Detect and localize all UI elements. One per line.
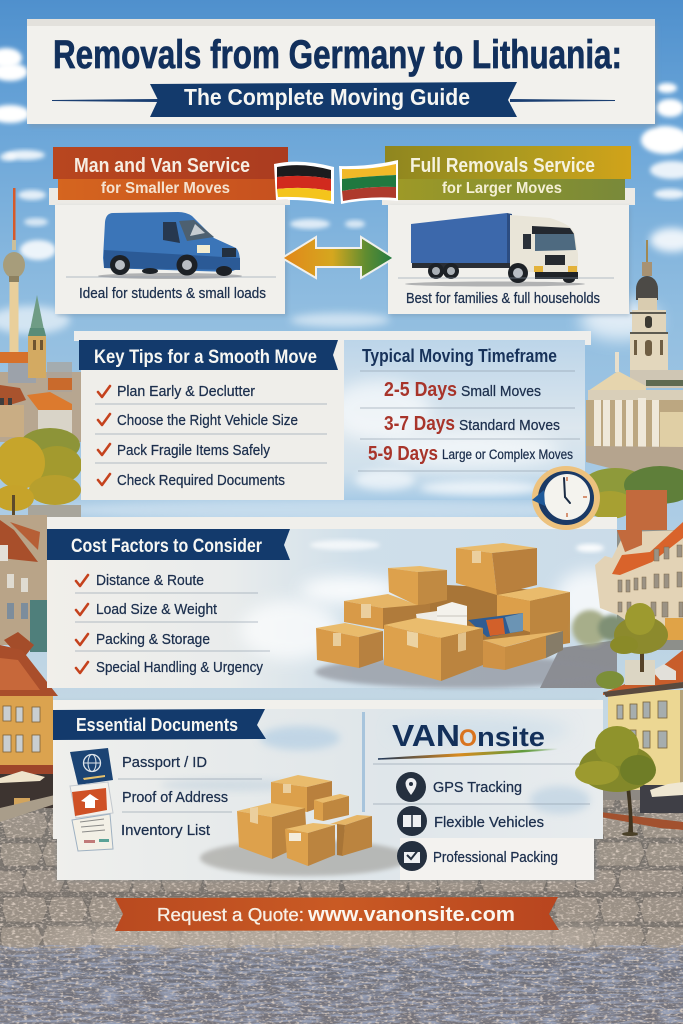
- box middle left: [344, 594, 430, 629]
- panel: moving timeframe: [330, 340, 585, 500]
- service header: [53, 147, 288, 200]
- white boxes: [416, 602, 467, 631]
- logo: VANonsite: VAN: [392, 718, 460, 753]
- foreground tree: [575, 726, 656, 836]
- cost list: Special Handling & Urgency: [96, 660, 264, 676]
- text: proof of address: Proof of Address: [122, 790, 228, 806]
- illustration: document boxes: [200, 775, 410, 876]
- panel: full removals service: [382, 146, 635, 316]
- blue and orange boxes: [468, 613, 523, 637]
- text: inventory list: Inventory List: [121, 823, 210, 839]
- icon: clock: [532, 466, 600, 530]
- logo: VANonsite: nsite: [477, 722, 545, 752]
- tree line behind buildings: [579, 466, 683, 519]
- heading: Typical Moving Timeframe: [362, 346, 557, 366]
- cost list: Packing & Storage: [96, 632, 210, 648]
- back: [420, 585, 545, 640]
- row: standard moves: Standard Moves: [459, 417, 560, 434]
- box front large: [384, 618, 483, 681]
- panel: key tips: [79, 340, 344, 500]
- caption: Ideal for students & small loads: [79, 286, 266, 302]
- orange corner building: [0, 645, 58, 822]
- service header: [385, 146, 631, 200]
- row: small moves: 2-5 Days: [384, 379, 457, 401]
- icon: GPS: [396, 772, 426, 802]
- heading ribbon: Key Tips for a Smooth Move: [94, 347, 317, 368]
- caption: Best for families & full households: [406, 291, 600, 307]
- box small: [314, 794, 349, 821]
- service header: Man and Van Service: [74, 155, 250, 177]
- call to action ribbon: Request a Quote:: [157, 904, 304, 925]
- panel: documents and company: [53, 700, 603, 881]
- tip list: Pack Fragile Items Safely: [117, 443, 271, 459]
- heading ribbon: [79, 340, 338, 370]
- illustration: stacked boxes: [315, 543, 615, 688]
- cost list: Load Size & Weight: [96, 602, 217, 618]
- cobblestone ground: [0, 775, 683, 1024]
- road in background: [540, 640, 617, 688]
- text: flexible vehicles: Flexible Vehicles: [434, 815, 544, 831]
- cost list: [76, 573, 264, 676]
- tip list: Plan Early & Declutter: [117, 384, 255, 400]
- row: large moves: Large or Complex Moves: [442, 447, 573, 462]
- text: passport: Passport / ID: [122, 755, 207, 771]
- box bottom left: [316, 623, 383, 668]
- box top right: [456, 543, 537, 595]
- subtitle ribbon: [52, 82, 615, 117]
- icon: proof of address: [70, 782, 113, 818]
- icon: German flag: [274, 162, 334, 204]
- panel: cost factors: [47, 517, 625, 688]
- right cityscape: [575, 240, 683, 830]
- box right: [497, 587, 570, 650]
- box back right: [330, 815, 372, 856]
- box big left: [237, 803, 307, 859]
- call to action ribbon: www.vanonsite.com: [307, 904, 515, 926]
- panel: tips and timeframe: [74, 331, 591, 500]
- panel: title: [27, 19, 657, 127]
- row: small moves: Small Moves: [461, 383, 541, 400]
- box front: [285, 823, 335, 866]
- neoclassical portico: [586, 352, 683, 448]
- row: standard moves: 3-7 Days: [384, 413, 455, 435]
- panel: man and van service: [49, 147, 290, 316]
- left cityscape: [0, 188, 82, 822]
- service header: for Larger Moves: [442, 180, 562, 197]
- TV tower: [3, 188, 25, 354]
- green tree: [610, 603, 668, 672]
- logo: VANonsite: O: [459, 725, 477, 752]
- yellow corner building: [603, 650, 683, 813]
- heading ribbon: [53, 709, 266, 740]
- box low right: [483, 631, 563, 670]
- heading ribbon: [47, 529, 290, 560]
- icon: inventory list: [72, 814, 113, 851]
- tip list: [98, 384, 298, 489]
- text: GPS tracking: GPS Tracking: [433, 780, 522, 796]
- icon: removals truck: [405, 213, 585, 286]
- row: standard moves: [384, 413, 560, 435]
- logo: VANonsite: [378, 718, 558, 759]
- icon: blue van: [98, 212, 242, 279]
- box upper: [388, 566, 447, 606]
- yellow-green trees: [0, 428, 82, 525]
- icon: passport: [70, 748, 113, 785]
- row: large moves: 5-9 Days: [368, 443, 438, 465]
- baroque church tower: [630, 240, 668, 370]
- heading ribbon: Cost Factors to Consider: [71, 536, 262, 557]
- service header: for Smaller Moves: [101, 180, 230, 197]
- church spire: [28, 295, 46, 378]
- arrow: between services: [282, 237, 394, 278]
- subtitle ribbon: The Complete Moving Guide: [184, 84, 470, 110]
- service header: Full Removals Service: [410, 155, 595, 177]
- text: professional packing: Professional Packing: [433, 850, 558, 866]
- icon: vehicles: [397, 806, 427, 836]
- right town buildings: [572, 522, 683, 689]
- highlight strip: [400, 838, 594, 880]
- icon: Lithuanian flag: [339, 160, 398, 204]
- call to action ribbon: [115, 897, 559, 931]
- cost list: Distance & Route: [96, 573, 204, 589]
- tip list: Choose the Right Vehicle Size: [117, 413, 298, 429]
- row: small moves: [384, 379, 541, 401]
- row: large moves: [368, 443, 573, 465]
- tip list: Check Required Documents: [117, 473, 285, 489]
- clouds: [0, 48, 683, 520]
- icon: packing: [397, 841, 427, 871]
- box top: [271, 775, 332, 812]
- heading ribbon: Essential Documents: [76, 715, 238, 735]
